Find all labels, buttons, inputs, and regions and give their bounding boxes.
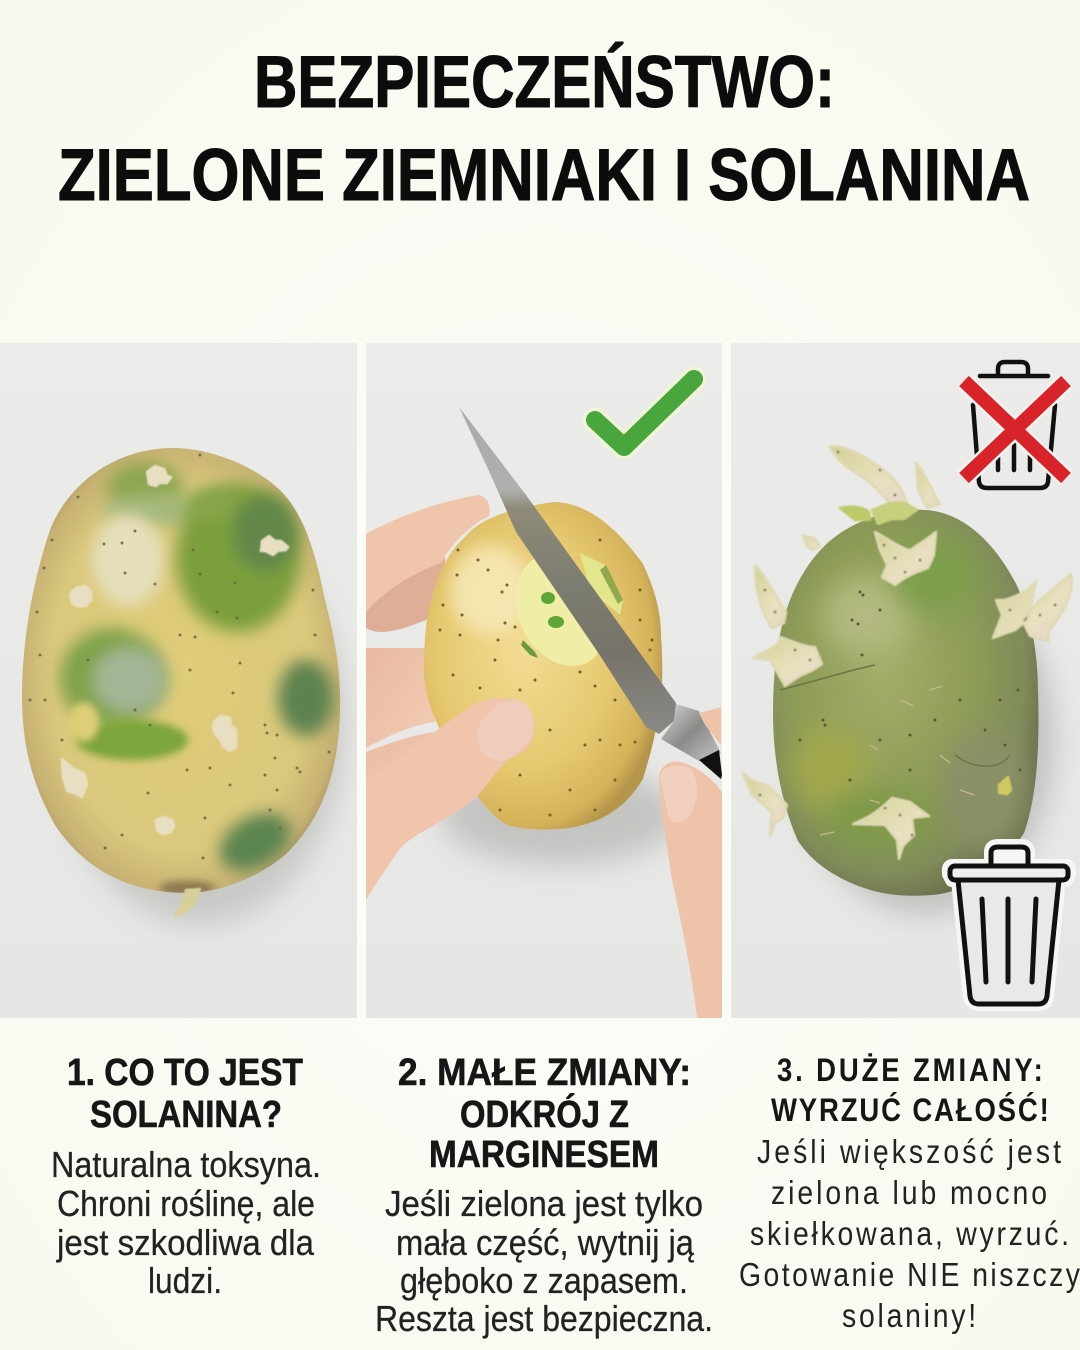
heading 2: ODKRÓJ Z — [460, 1092, 629, 1136]
heading 2 — [398, 1052, 691, 1176]
sprout specks — [760, 452, 1055, 835]
sprouts — [743, 446, 1072, 859]
heading 2: MARGINESEM — [429, 1134, 659, 1176]
caption: column 1 — [51, 1052, 321, 1301]
body text 1: Naturalna toksyna. — [51, 1144, 321, 1185]
body text 1 — [51, 1144, 321, 1301]
caption: column 3 — [739, 1053, 1080, 1335]
title: BEZPIECZEŃSTWO: — [254, 42, 835, 123]
heading 2: 2. MAŁE ZMIANY: — [398, 1052, 691, 1094]
heading 1: 1. CO TO JEST — [67, 1052, 303, 1094]
sprouts — [62, 466, 288, 915]
upper finger — [366, 495, 490, 612]
icon: crossed out trash can — [964, 362, 1066, 488]
potato 3 — [773, 510, 1038, 896]
shadow under potato — [80, 610, 354, 933]
body text 3: Gotowanie NIE niszczy — [739, 1256, 1080, 1294]
heading 1: SOLANINA? — [90, 1094, 282, 1136]
heading 3: WYRZUĆ CAŁOŚĆ! — [771, 1092, 1049, 1129]
body text 3: skiełkowana, wyrzuć. — [750, 1215, 1069, 1253]
panel: cutting away small green part — [366, 343, 722, 1018]
hidden fingers left — [366, 550, 445, 782]
panel: potato with green patches — [0, 343, 357, 1018]
thumb — [366, 698, 534, 900]
body text 1: jest szkodliwa dla — [56, 1222, 315, 1263]
body text 2: głęboko z zapasem. — [400, 1260, 688, 1301]
heading 1 — [67, 1052, 303, 1136]
knife — [459, 407, 722, 779]
shadow under potato — [440, 765, 680, 865]
body text 2: Jeśli zielona jest tylko — [385, 1183, 703, 1224]
icon: green check mark — [595, 379, 694, 447]
left hand — [366, 495, 534, 900]
body text 2 — [375, 1183, 713, 1339]
potato 2 — [424, 502, 662, 830]
body text 3: Jeśli większość jest — [757, 1133, 1061, 1171]
shadow under potato — [822, 638, 1066, 926]
speckles — [30, 455, 329, 858]
body text 1: ludzi. — [148, 1260, 222, 1301]
right hand — [659, 707, 722, 1018]
panel: heavily sprouted green potato — [731, 343, 1080, 1018]
caption: column 2 — [375, 1052, 713, 1339]
body text 2: Reszta jest bezpieczna. — [375, 1298, 713, 1339]
thumb nail — [477, 700, 534, 761]
potato 1 — [22, 448, 340, 915]
heading 3: 3. DUŻE ZMIANY: — [777, 1053, 1043, 1089]
body text 1: Chroni roślinę, ale — [57, 1183, 315, 1224]
body text 3 — [739, 1133, 1080, 1335]
heading 3 — [771, 1053, 1049, 1129]
icon: trash can — [949, 846, 1069, 1004]
body text 3: zielona lub mocno — [771, 1174, 1047, 1212]
body text 2: mała część, wytnij ją — [396, 1222, 695, 1263]
title — [58, 42, 1030, 216]
body text 3: solaniny! — [842, 1297, 976, 1335]
